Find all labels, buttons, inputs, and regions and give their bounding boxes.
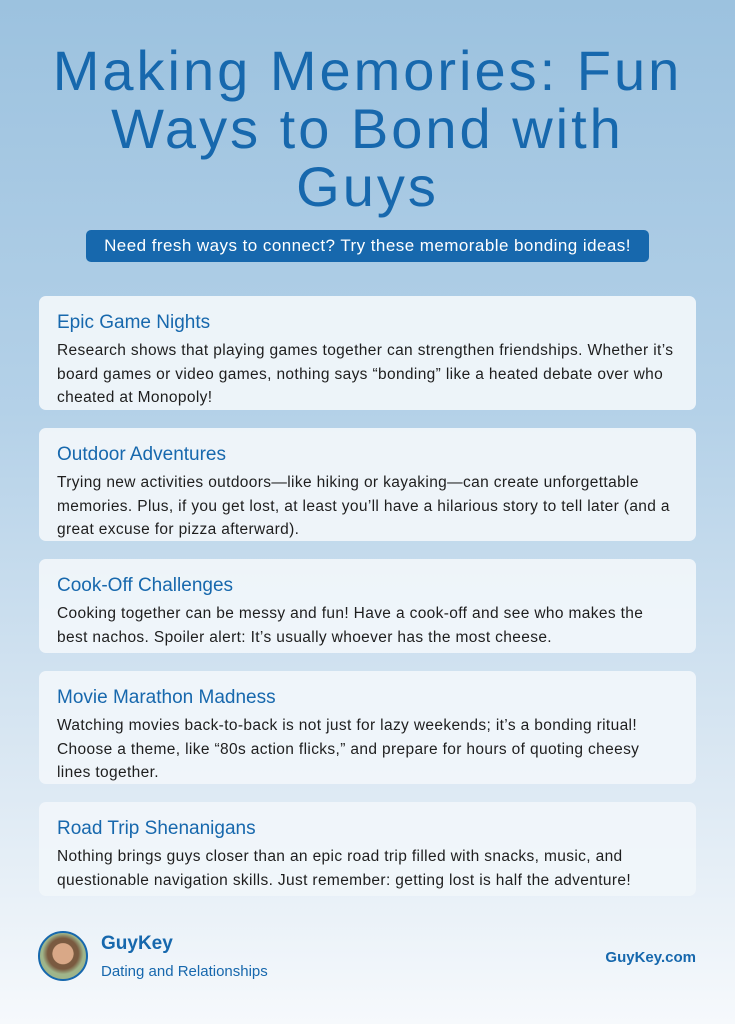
panel: outdoor adventures: Outdoor Adventures: [57, 444, 226, 465]
panel: road trip: Nothing brings guys closer than an epic road trip filled with snacks, music, and: [57, 848, 623, 865]
panel: movie marathon: Choose a theme, like “80s action flicks,” and prepare for hours of quoting cheesy: [57, 740, 639, 758]
panel: epic game nights: Epic Game Nights: [57, 312, 210, 333]
panel: cook-off: Cooking together can be messy and fun! Have a cook-off and see who makes the: [57, 605, 643, 622]
panel: outdoor adventures: [39, 428, 696, 541]
panel: movie marathon: [39, 671, 696, 784]
website: GuyKey.com: [605, 949, 696, 966]
tagline: Dating and Relationships: [101, 963, 268, 980]
panel: movie marathon: Watching movies back-to-back is not just for lazy weekends; it’s a bonding ritual!: [57, 717, 637, 734]
panel: cook-off: Cook-Off Challenges: [57, 575, 233, 596]
footer: [38, 931, 696, 981]
icon: avatar: [38, 931, 88, 981]
title: Making Memories: Fun Ways to Bond with Guys: [53, 39, 682, 218]
panel: road trip: Road Trip Shenanigans: [57, 818, 256, 839]
panel: cook-off: [39, 559, 696, 653]
panel: movie marathon: Movie Marathon Madness: [57, 687, 276, 708]
subtitle banner: Need fresh ways to connect? Try these memorable bonding ideas!: [104, 236, 631, 255]
panel: epic game nights: Research shows that playing games together can strengthen friendships. Whether it’s: [57, 342, 673, 359]
panel: road trip: [39, 802, 696, 896]
panel: movie marathon: lines together.: [57, 764, 159, 781]
panel: epic game nights: board games or video games, nothing says “bonding” like a heated debate over who: [57, 366, 663, 382]
panel: outdoor adventures: great excuse for pizza afterward).: [57, 521, 299, 538]
panel: outdoor adventures: Trying new activities outdoors—like hiking or kayaking—can create unforgettable: [57, 474, 639, 491]
panel: outdoor adventures: memories. Plus, if you get lost, at least you’ll have a hilarious story to tell later (and a: [57, 498, 670, 514]
brand name: GuyKey: [101, 933, 173, 954]
subtitle banner: [86, 230, 649, 262]
panel: road trip: questionable navigation skills. Just remember: getting lost is half the adventure!: [57, 872, 631, 888]
panel: epic game nights: [39, 296, 696, 410]
panel: cook-off: best nachos. Spoiler alert: It’s usually whoever has the most cheese.: [57, 628, 552, 646]
panel: epic game nights: cheated at Monopoly!: [57, 389, 212, 406]
